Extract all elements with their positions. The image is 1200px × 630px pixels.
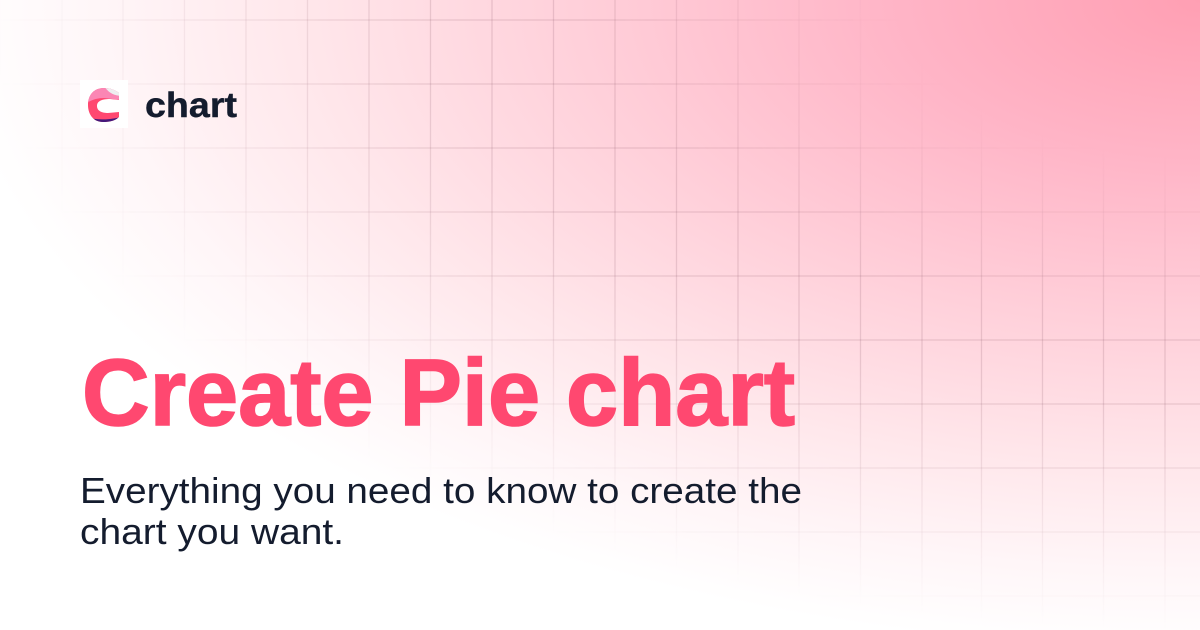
title: Create Pie chart bbox=[82, 340, 795, 446]
subtitle: Everything you need to know to create the bbox=[80, 470, 802, 511]
logo icon bbox=[80, 80, 128, 128]
subtitle bbox=[80, 470, 802, 552]
brand name: chart bbox=[145, 86, 237, 125]
subtitle: chart you want. bbox=[80, 511, 344, 552]
